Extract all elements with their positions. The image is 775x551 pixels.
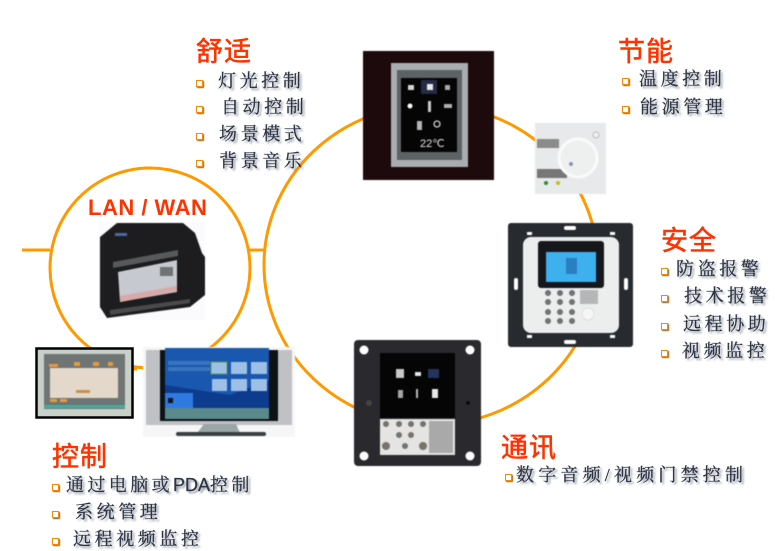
text block: control [52,442,253,550]
small connector between touch screen and TV [130,368,137,370]
device: room control panel: 22℃ [420,138,445,150]
bullet list: security: 视频监控 [682,340,768,360]
bullet list: comfort [196,70,307,172]
text block: energy saving [618,36,726,118]
bullet list: security [661,258,770,362]
text block: security [661,226,770,362]
bullet list: communication: 数字音频/视频门禁控制 [516,464,747,484]
device: touch screen [36,348,132,418]
bullet list: comfort: 场景模式 [219,124,305,144]
bullet list: security: 远程协助 [683,314,769,334]
heading: comfort: 舒适 [196,36,252,66]
device: intercom [354,340,481,466]
bullet list: energy saving: 温度控制 [639,68,725,88]
text block: comfort [196,36,307,172]
heading: communication: 通讯 [501,432,557,462]
bullet list: control: 远程视频监控 [73,528,203,548]
heading: energy saving: 节能 [618,36,674,66]
controller ring [50,168,250,368]
bullet list: energy saving [622,68,726,118]
device: room control panel [363,51,494,180]
bullet list: energy saving: 能源管理 [640,96,726,116]
bullet list: control: 通过电脑或PDA控制 [66,474,253,494]
bullet list: security: 防盗报警 [676,258,762,278]
left connector [22,248,50,252]
device: security panel [508,223,633,347]
ring connector [249,248,266,252]
heading: control: 控制 [52,442,108,472]
heading: security: 安全 [661,226,717,256]
device: monitor with control interface [143,347,295,437]
bullet list: control [52,474,253,550]
device: thermostat [535,123,606,194]
heading: LAN / WAN: LAN / WAN [88,195,207,220]
bullet list: comfort: 灯光控制 [218,70,304,90]
device: DIN rail controller [98,222,205,320]
bullet list: security: 技术报警 [684,286,770,306]
bullet list: comfort: 自动控制 [221,96,307,116]
bullet list: control: 系统管理 [75,502,161,522]
text block: communication [501,432,747,486]
bullet list: comfort: 背景音乐 [219,150,305,170]
large system ring [264,105,598,425]
